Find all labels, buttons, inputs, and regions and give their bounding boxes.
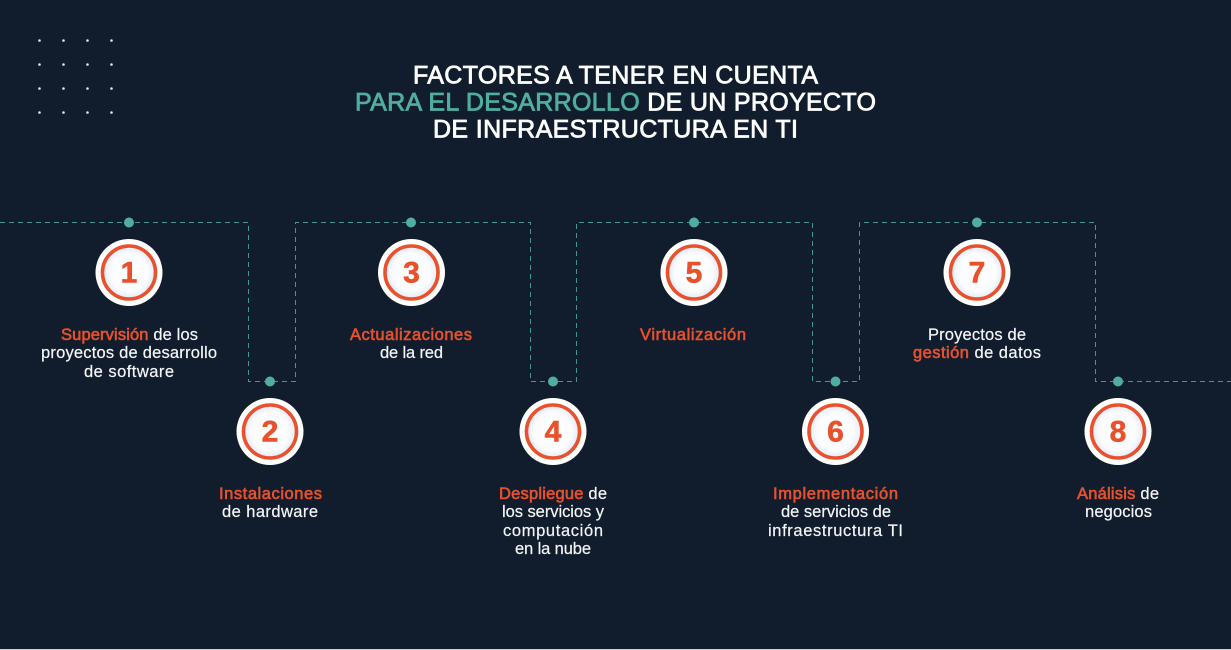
dashed connector timeline bbox=[0, 222, 1231, 382]
step 3: de la red bbox=[380, 344, 443, 362]
step 1: de software bbox=[84, 363, 174, 381]
step 6 bbox=[768, 376, 903, 540]
step 3 bbox=[350, 218, 472, 362]
step 2: de hardware bbox=[222, 503, 318, 521]
step 3: 3 bbox=[403, 256, 420, 290]
step 1 bbox=[41, 218, 217, 381]
step 1: 1 bbox=[121, 256, 137, 290]
step 5: Virtualización bbox=[640, 326, 746, 344]
title: FACTORES A TENER EN CUENTA bbox=[413, 62, 818, 90]
step 8: 8 bbox=[1110, 416, 1126, 448]
title: PARA EL DESARROLLO DE UN PROYECTO bbox=[355, 88, 876, 116]
step 5: 5 bbox=[686, 256, 702, 290]
step 4: en la nube bbox=[515, 540, 591, 558]
step 1: proyectos de desarrollo bbox=[41, 344, 217, 362]
step 8: Análisis de bbox=[1077, 485, 1159, 503]
step 2 bbox=[219, 376, 322, 521]
dot grid decoration bbox=[38, 39, 113, 114]
title: DE INFRAESTRUCTURA EN TI bbox=[433, 116, 798, 144]
step 4 bbox=[499, 376, 607, 558]
step 4: 4 bbox=[545, 416, 562, 448]
step 8 bbox=[1077, 376, 1159, 521]
step 6: 6 bbox=[827, 416, 844, 448]
step 2: Instalaciones bbox=[219, 485, 322, 503]
step 4: los servicios y bbox=[502, 503, 605, 521]
step 4: computación bbox=[503, 522, 603, 540]
step 1: Supervisión de los bbox=[61, 326, 198, 344]
step 6: infraestructura TI bbox=[768, 522, 903, 540]
title bbox=[355, 62, 876, 144]
step 7: 7 bbox=[969, 256, 985, 290]
step 7: gestión de datos bbox=[913, 344, 1041, 362]
step 4: Despliegue de bbox=[499, 485, 607, 503]
step 6: de servicios de bbox=[781, 503, 891, 521]
step 2: 2 bbox=[262, 416, 278, 448]
step 7: Proyectos de bbox=[928, 326, 1026, 344]
step 8: negocios bbox=[1085, 503, 1152, 521]
step 7 bbox=[913, 218, 1041, 362]
step 5 bbox=[640, 218, 746, 344]
step 3: Actualizaciones bbox=[350, 326, 472, 344]
step 6: Implementación bbox=[773, 485, 898, 503]
